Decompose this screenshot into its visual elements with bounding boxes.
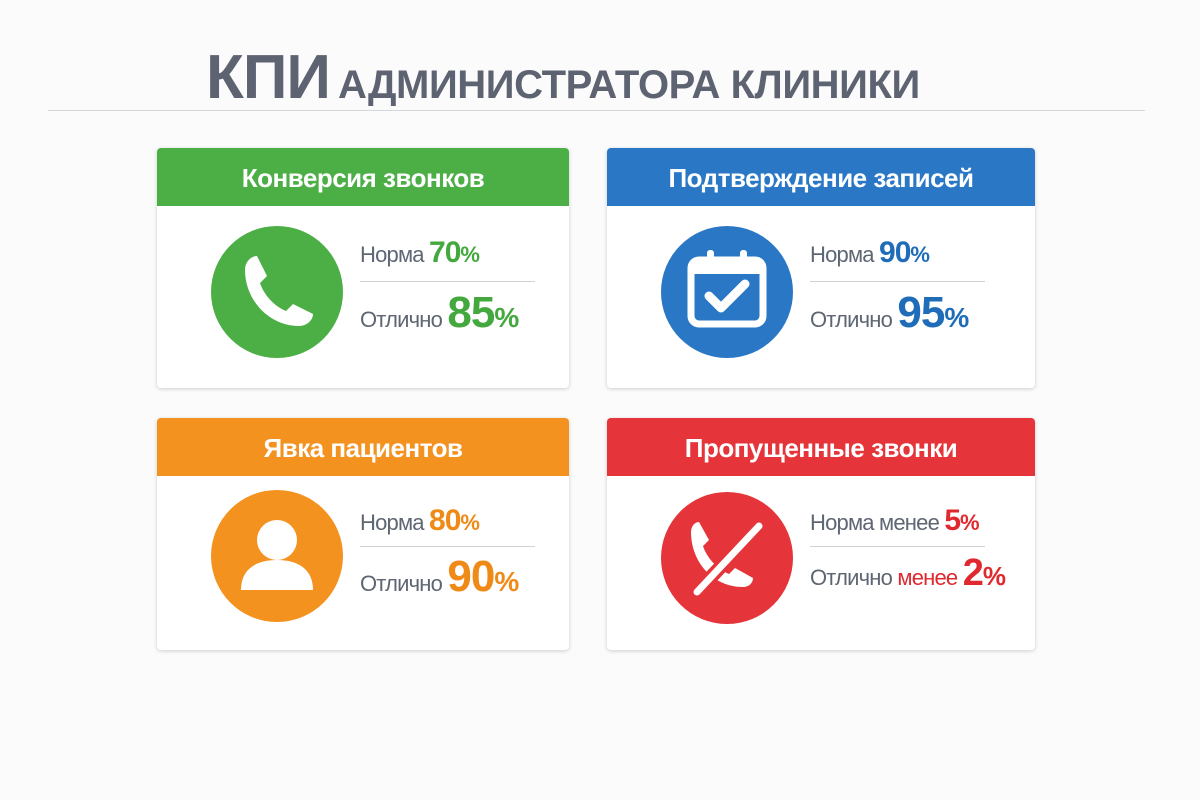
icon: person: [211, 490, 343, 622]
heading: call conversion: Конверсия звонков: [242, 163, 484, 193]
text: norm: Норма 70%: [360, 236, 479, 269]
text: norm: Норма 80%: [360, 504, 479, 537]
heading: missed calls: Пропущенные звонки: [685, 433, 957, 463]
text: excellent: Отлично 85%: [360, 288, 518, 337]
text: excellent: Отлично 90%: [360, 552, 518, 601]
heading: call conversion: [157, 148, 569, 206]
icon: crossed phone: [661, 492, 793, 624]
text: excellent: Отлично 95%: [810, 288, 968, 337]
heading: confirmation: Подтверждение записей: [668, 163, 974, 193]
panel: confirmation: [607, 148, 1035, 388]
text: norm: Норма 90%: [810, 236, 929, 269]
icon: phone: [211, 226, 343, 358]
panel: missed calls: [607, 418, 1035, 650]
panel: call conversion: [157, 148, 569, 388]
icon: calendar: [661, 226, 793, 358]
heading: attendance: Явка пациентов: [264, 433, 462, 463]
panel: attendance: [157, 418, 569, 650]
text: norm: Норма менее 5%: [810, 504, 979, 537]
heading: missed calls: [607, 418, 1035, 476]
text: excellent: Отлично менее 2%: [810, 552, 1005, 594]
heading: attendance: [157, 418, 569, 476]
title: КПИАДМИНИСТРАТОРА КЛИНИКИ: [206, 43, 920, 112]
heading: confirmation: [607, 148, 1035, 206]
